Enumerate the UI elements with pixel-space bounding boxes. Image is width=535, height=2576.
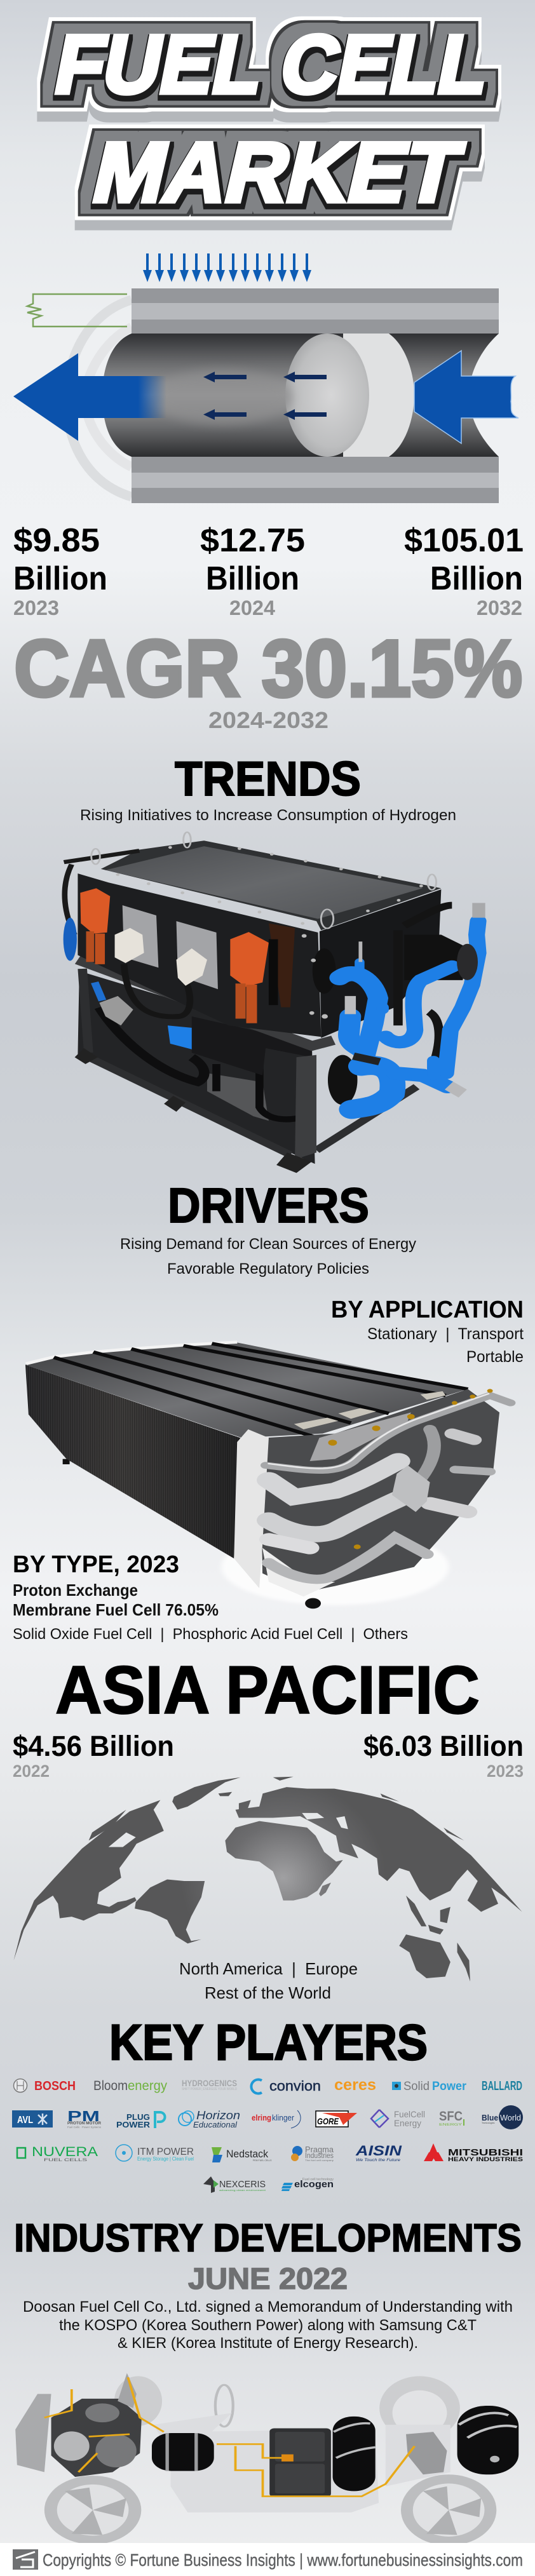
stat 2032 [404, 522, 524, 619]
logo: Proton Motor: Fuel Cells · Power Systems [67, 2126, 102, 2129]
region stat 2023: $6.03 Billion [363, 1730, 524, 1762]
logo: Pragma Industries [291, 2145, 334, 2162]
top handle and cable [64, 851, 139, 934]
logo: Nuvera: FUEL CELLS [44, 2159, 87, 2162]
top electrode plate [132, 288, 499, 334]
orange connector right [230, 932, 269, 1023]
logo: Hydrogenics: HYDROGENICS [182, 2078, 237, 2088]
stack glow [221, 1529, 449, 1605]
by type leader: Membrane Fuel Cell 76.05% [13, 1600, 219, 1619]
logo: Plug Power: POWER [116, 2120, 151, 2129]
logo: Convion [251, 2078, 321, 2094]
by application heading: BY APPLICATION [331, 1297, 524, 1323]
image: fuel cell stack with silver manifolds [25, 1342, 510, 1608]
Eurasia [236, 1787, 522, 1912]
logo: Convion: convion [269, 2078, 321, 2094]
development description: & KIER (Korea Institute of Energy Research). [118, 2335, 418, 2352]
region list [179, 1959, 358, 2002]
blue pipe left side [64, 918, 192, 1049]
wheel hubs upper [393, 2391, 447, 2436]
icon: small navy arrows [203, 372, 327, 420]
dark tube interior [102, 334, 499, 457]
logo: Proton Motor [67, 2108, 102, 2129]
silver end plate [234, 1429, 269, 1588]
dark cable and strip [124, 924, 295, 1016]
logo: AVL: AVL [17, 2115, 33, 2126]
logo: FuelCell Energy: Energy [394, 2118, 421, 2128]
key players heading: KEY PLAYERS [109, 2014, 428, 2070]
side plate [310, 1412, 411, 1461]
logo: Proton Motor: PROTON MOTOR [67, 2122, 102, 2126]
market size stats [13, 522, 524, 619]
drivers text [120, 1236, 416, 1278]
lid [101, 840, 441, 930]
Africa [225, 1821, 343, 1901]
logo: Hydrogenics [182, 2078, 237, 2091]
white connectors [115, 928, 207, 986]
logo: Aisin: AISIN [355, 2143, 402, 2159]
logo: Plug Power: PLUG [126, 2112, 150, 2122]
battery box [269, 2428, 331, 2497]
CAGR period: 2024-2032 [208, 707, 328, 733]
lower front wheel [44, 2476, 141, 2544]
silver panels [123, 905, 218, 989]
tan end patches [294, 1391, 445, 1429]
logo: Nedstack [212, 2147, 272, 2162]
pipe fittings [350, 903, 478, 1093]
logo: Horizon Educational [179, 2109, 240, 2129]
black hoses [398, 905, 452, 1060]
logo: Blue World: World [500, 2113, 521, 2122]
development date: JUNE 2022 [188, 2262, 348, 2295]
logo: Hydrogenics: SHIFT POWER | ENERGIZE YOUR WORLD [182, 2087, 237, 2091]
yellow hydrogen lines [44, 2377, 414, 2497]
Australia [399, 1934, 450, 1978]
logo: Elcogen [281, 2178, 334, 2191]
left face [78, 873, 321, 1037]
trends heading: TRENDS [175, 752, 361, 806]
stat 2032: $105.01 [404, 522, 524, 559]
hydrogen tank middle [333, 2417, 376, 2491]
region stat 2023: 2023 [487, 1762, 524, 1781]
logo: Bosch [14, 2079, 76, 2093]
logo: Nexceris: advancing clean environment [219, 2188, 266, 2192]
logo: Horizon Educational: Horizon [196, 2109, 240, 2122]
logo: SolidPower [392, 2080, 467, 2093]
brass bolts [328, 1389, 493, 1549]
footer logo [13, 2549, 38, 2570]
development description: Doosan Fuel Cell Co., Ltd. signed a Memorandum of Understanding with [23, 2298, 513, 2316]
green external circuit with resistor [27, 294, 127, 327]
title line: FUEL CELL: FUEL CELL [48, 18, 497, 111]
logo: Nedstack: Nedstack [226, 2148, 268, 2160]
by type others: Solid Oxide Fuel Cell | Phosphoric Acid Fuel Cell | Others [13, 1626, 408, 1643]
drivers text: Favorable Regulatory Policies [167, 1260, 369, 1278]
logo: Aisin [355, 2143, 402, 2162]
foot [63, 1459, 321, 1608]
logo: SolidPower: Power [432, 2080, 467, 2093]
industry developments heading: INDUSTRY DEVELOPMENTS [14, 2216, 522, 2260]
Madagascar [319, 1883, 331, 1896]
logo: Blue World: Blue [482, 2113, 498, 2122]
logo: Nexceris: NEXCERIS [219, 2179, 266, 2190]
logo: SFC Energy: ENERGY [439, 2123, 463, 2127]
region stat 2022: $4.56 Billion [13, 1730, 174, 1762]
region list: North America | Europe [179, 1959, 358, 1978]
Greenland [172, 1777, 241, 1810]
logo: ElringKlinger: klinger [272, 2113, 295, 2122]
drivers text: Rising Demand for Clean Sources of Energy [120, 1236, 416, 1253]
North America [13, 1800, 164, 1960]
top face [25, 1342, 468, 1438]
logo: Proton Motor: PM [67, 2108, 100, 2124]
Caspian and Black Sea [302, 1813, 348, 1829]
by type leader [13, 1581, 219, 1619]
logo: Bloom Energy [93, 2079, 167, 2093]
development description [23, 2298, 513, 2352]
logo: Mitsubishi Heavy Industries [424, 2143, 523, 2162]
logo: ITM Power [116, 2145, 194, 2162]
lower rear wheel [401, 2474, 496, 2546]
region heading: ASIA PACIFIC [55, 1652, 480, 1728]
title [48, 18, 497, 220]
logo: Blue World: Technologies [482, 2122, 495, 2124]
hydrogen valve [281, 2455, 294, 2462]
stat 2032: Billion [430, 560, 523, 597]
logo: Blue World [482, 2105, 523, 2129]
logo: SolidPower: Solid [403, 2080, 430, 2093]
logo: Elcogen: Fuel cell technology [302, 2178, 334, 2182]
logo: FuelCell Energy [371, 2109, 425, 2128]
logo: Nuvera [17, 2145, 98, 2162]
logo grid [12, 2076, 523, 2193]
region stat 2023 [363, 1730, 524, 1781]
logo: ElringKlinger: elring [252, 2113, 271, 2122]
stat 2023: $9.85 [13, 522, 100, 559]
radiator [15, 2394, 51, 2472]
South America [135, 1879, 205, 1943]
logo: Nuvera: NUVERA [32, 2145, 98, 2159]
region stat 2022 [13, 1730, 174, 1781]
logo: Pragma Industries: The fuel cell company [305, 2159, 334, 2162]
module frame [75, 960, 417, 1173]
stat 2023 [13, 522, 107, 619]
electrolyte disc body [343, 334, 414, 457]
stat 2032: 2032 [477, 597, 522, 619]
logo: Gore: GORE [317, 2116, 339, 2126]
dark machinery [313, 934, 469, 1105]
faint upper wheels [114, 2376, 460, 2440]
logo: Nexceris [203, 2176, 266, 2193]
logo: SFC Energy: SFC [439, 2109, 463, 2124]
trends text: Rising Initiatives to Increase Consumption of Hydrogen [80, 807, 456, 824]
hydrogen tank rear [457, 2406, 518, 2474]
region stat 2022: 2022 [13, 1762, 50, 1781]
hydrogen tank front [152, 2433, 214, 2471]
silver tubes [266, 1394, 510, 1579]
logo: Pragma Industries: Pragma [305, 2145, 334, 2154]
lid panel [105, 846, 423, 919]
logo: ElringKlinger [252, 2110, 301, 2128]
by application list: Portable [466, 1348, 524, 1366]
footer band [0, 2543, 535, 2576]
bottom electrode plate [132, 457, 499, 503]
steering wheel [215, 2385, 233, 2427]
logo: Mitsubishi Heavy Industries: MITSUBISHI [448, 2147, 523, 2158]
region list: Rest of the World [205, 1983, 331, 2002]
image: fuel cell module with blue pipes [64, 832, 478, 1173]
icon: small blue arrows row [143, 253, 311, 282]
valve plate [392, 1466, 430, 1512]
stat 2024: 2024 [229, 597, 275, 619]
stat 2023: Billion [13, 560, 107, 597]
white lower manifold [262, 1548, 335, 1596]
arrow: large blue intake right [414, 351, 518, 443]
by application list [367, 1325, 524, 1366]
orange connector left [80, 888, 110, 964]
logo: Bloom Energy: energy [128, 2079, 167, 2093]
logo: Horizon Educational: Educational [193, 2120, 238, 2129]
electrolyte disc face [285, 334, 369, 457]
logo: FuelCell Energy: FuelCell [394, 2109, 425, 2119]
rivets [116, 846, 423, 1019]
right face [320, 889, 441, 1038]
logo: Mitsubishi Heavy Industries: HEAVY INDUSTRIES [448, 2156, 523, 2162]
drivers heading: DRIVERS [168, 1178, 369, 1233]
logo: Bloom Energy: Bloom [93, 2079, 128, 2093]
logo: Ceres: ceres [334, 2076, 376, 2094]
stat 2024: Billion [206, 560, 299, 597]
chassis [154, 2413, 450, 2512]
stat 2024 [200, 522, 305, 619]
top white back edge [26, 1342, 237, 1364]
manifold backdrop [261, 1389, 499, 1593]
fuel cell cutaway diagram [13, 253, 518, 503]
black stripes [54, 1344, 468, 1438]
title line: MARKET: MARKET [85, 125, 470, 220]
logo: ITM Power: ITM POWER [137, 2147, 194, 2157]
image: fuel cell vehicle chassis [15, 2373, 518, 2546]
logo: Nedstack: PEM FUEL CELLS [253, 2159, 272, 2162]
stat 2024: $12.75 [200, 522, 305, 559]
logo: Aisin: We Touch the Future [356, 2159, 401, 2162]
by type leader: Proton Exchange [13, 1581, 138, 1600]
logo: Elcogen: elcogen [294, 2179, 334, 2190]
rear drive unit [406, 2432, 447, 2474]
central haze [152, 370, 292, 424]
eye bolts [91, 832, 437, 928]
Hudson Bay [109, 1832, 136, 1847]
logo: Pragma Industries: Industries [305, 2151, 334, 2160]
islands [89, 1777, 470, 1981]
logo: AVL [12, 2110, 53, 2128]
logo: Plug Power [116, 2112, 165, 2129]
gray fitting [99, 996, 133, 1025]
blue pipes [339, 921, 478, 1109]
stat 2023: 2023 [13, 597, 59, 619]
engine bay [51, 2373, 142, 2477]
logo: Bosch: BOSCH [34, 2079, 76, 2093]
logo: Gore [316, 2111, 357, 2127]
world map [13, 1777, 522, 1981]
by application list: Stationary | Transport [367, 1325, 524, 1343]
black side face [25, 1365, 240, 1558]
CAGR heading: CAGR 30.15% [14, 623, 522, 713]
logo: ITM Power: Energy Storage | Clean Fuel [137, 2156, 194, 2162]
development description: the KOSPO (Korea Southern Power) along with Samsung C&T [59, 2317, 477, 2334]
outer light rings [67, 300, 132, 497]
by type heading: BY TYPE, 2023 [13, 1551, 179, 1578]
arrow: large blue exhaust left [13, 353, 166, 441]
